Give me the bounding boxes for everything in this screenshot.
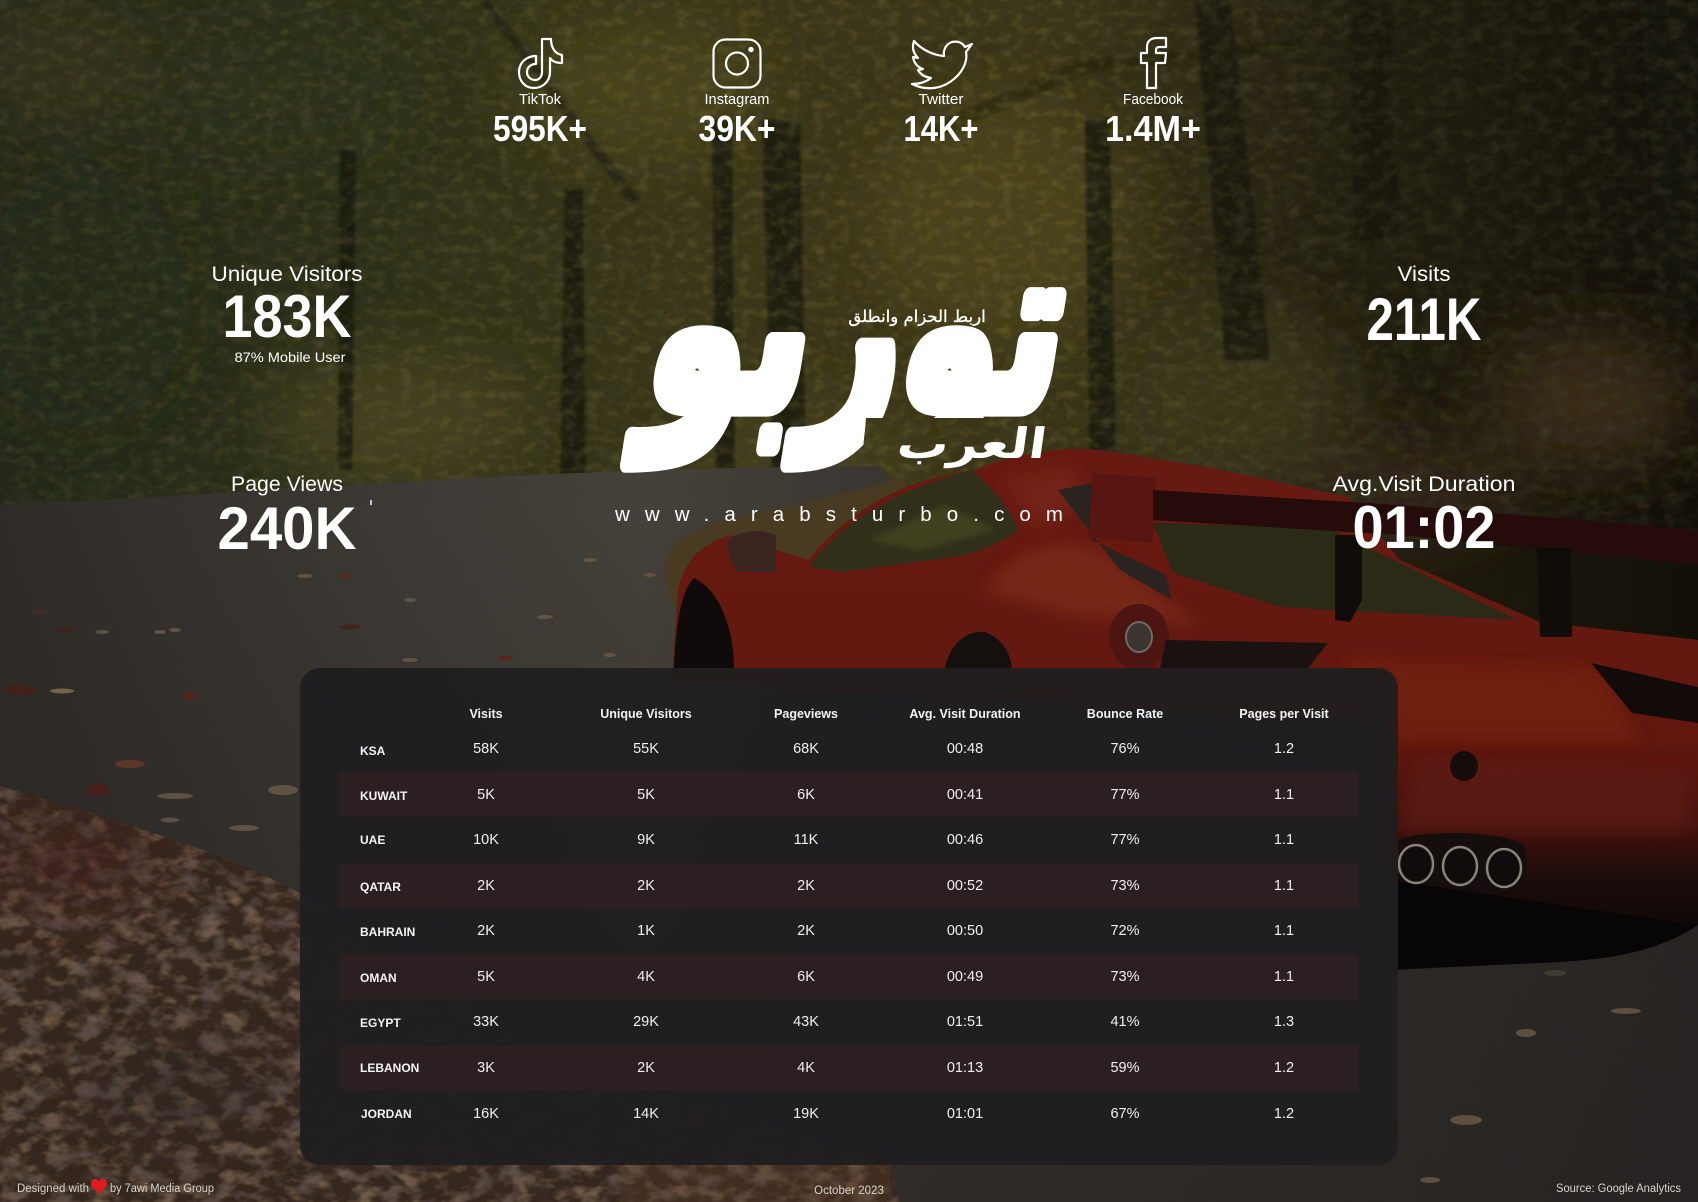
row: UAE [360,832,1294,848]
road surface [0,466,1698,1202]
row: Bahrain: 2K [797,923,815,939]
table stripes [339,772,1358,1090]
row: UAE: UAE [360,833,385,847]
stat: unique visitors: Unique Visitors [212,262,362,286]
logo tagline: اربط الحزام وانطلق [848,307,986,327]
row: UAE: 77% [1110,832,1140,848]
row: Jordan: 19K [793,1106,819,1122]
row: KSA: 55K [633,741,659,757]
row: Bahrain: 00:50 [947,923,983,939]
rear wheel arch [945,632,1012,668]
stat: unique visitors [212,262,362,365]
stat: page views: 240K [218,495,356,562]
icon: heart [91,1179,107,1194]
website url: www.arabsturbo.com [614,503,1063,526]
exhausts [1399,845,1521,887]
row: Egypt: 33K [473,1014,499,1030]
row: KSA: 1.2 [1274,741,1294,757]
windshield [809,470,1018,572]
row: UAE: 11K [794,832,819,848]
row: KSA: 76% [1110,741,1140,757]
row: Qatar: 00:52 [947,878,983,894]
row: Oman: 5K [477,969,495,985]
row: Kuwait [360,787,1294,803]
stat: unique visitors: 87% Mobile User [234,349,346,365]
logo: Arabs Turbo [615,287,1067,521]
row: Bahrain: 1K [637,923,655,939]
ground leaves bed [0,760,920,1202]
row: Bahrain: 2K [477,923,495,939]
stat: visits: Visits [1398,262,1450,286]
row: Jordan: JORDAN [361,1107,412,1121]
twitter stat [904,41,978,149]
row: KSA [360,741,1294,758]
icon: twitter [912,41,972,88]
carbon side intake [1058,483,1172,600]
instagram stat: 39K+ [698,108,776,149]
twitter stat: 14K+ [904,108,978,149]
row: Kuwait: 5K [477,787,495,803]
table header: Pageviews [774,707,838,721]
icon: instagram [714,40,760,88]
panel: country table [300,668,1398,1165]
roadside leaves near car [665,478,925,625]
row: Kuwait: 1.1 [1274,787,1294,803]
row: Egypt: 01:51 [947,1014,983,1030]
row: UAE: 00:46 [947,832,983,848]
tiktok stat [493,39,587,149]
road grain [0,500,1698,1202]
front wheel [674,578,734,668]
stat: unique visitors: 183K [222,283,352,350]
row: Lebanon: 3K [477,1060,495,1076]
road depth shade [0,466,1698,1202]
footer credit: by 7awi Media Group [110,1183,214,1195]
forest lit foliage [0,0,1690,540]
facebook stat: 1.4M+ [1105,108,1201,149]
row: Bahrain [360,923,1294,939]
footer credit: Designed with [17,1183,89,1195]
row: Bahrain: 1.1 [1274,923,1294,939]
logo main wordmark: توربو [625,196,1088,464]
table header [469,707,1330,721]
row: Jordan: 01:01 [947,1106,983,1122]
twitter stat: Twitter [918,92,964,108]
tail light [1109,604,1169,670]
facebook stat [1105,38,1201,149]
icon: tiktok [519,39,562,88]
row: Kuwait: 5K [637,787,655,803]
dark vent [1160,640,1328,668]
tiktok stat: TikTok [519,92,562,108]
table header: Bounce Rate [1087,707,1163,721]
row: Egypt: 1.3 [1274,1014,1294,1030]
stat: page views: Page Views [231,472,343,496]
rear wing [1153,490,1698,565]
footer source: Source: Google Analytics [1556,1183,1681,1195]
foliage texture light [0,0,1698,540]
row: Qatar: 2K [637,878,655,894]
row: Qatar: 2K [477,878,495,894]
row: Qatar: 73% [1110,878,1140,894]
tail light centre [1126,622,1152,652]
instagram stat: Instagram [704,92,770,108]
footer credit [17,1179,214,1195]
row: Egypt: 41% [1110,1014,1140,1030]
row: Kuwait: 6K [797,787,815,803]
row: Oman: 1.1 [1274,969,1294,985]
row: Lebanon [360,1060,1294,1076]
row: UAE: 10K [473,832,499,848]
row: Lebanon: LEBANON [360,1061,419,1075]
row: Qatar: 1.1 [1274,878,1294,894]
row: Oman: 6K [797,969,815,985]
stat: page views [218,472,372,562]
table header: Avg. Visit Duration [909,707,1021,721]
windshield reflection [870,505,995,550]
row: KSA: 68K [793,741,819,757]
table header: Unique Visitors [600,707,692,721]
instagram stat [698,40,776,149]
row: Egypt [360,1014,1294,1030]
row: Jordan: 14K [633,1106,659,1122]
tiktok stat: 595K+ [493,108,587,149]
car under shadow [1390,830,1698,970]
row: Jordan: 16K [473,1106,499,1122]
row: UAE: 9K [637,832,655,848]
row: Jordan: 1.2 [1274,1106,1294,1122]
rear fin [1089,473,1156,543]
row: Egypt: 43K [793,1014,819,1030]
exhaust surround [1398,833,1526,892]
icon: facebook [1141,38,1166,88]
row: KSA: 00:48 [947,741,983,757]
row: Lebanon: 59% [1110,1060,1140,1076]
facebook stat: Facebook [1123,92,1184,108]
row: KSA: 58K [473,741,499,757]
row: Jordan [361,1106,1294,1122]
engine cover glass [1153,523,1517,620]
row: Qatar: QATAR [360,880,401,894]
stat: average visit duration: Avg.Visit Duration [1332,472,1516,496]
row: Kuwait: KUWAIT [360,789,408,803]
stat: visits [1366,262,1482,353]
row: Oman [360,969,1294,985]
stat: average visit duration [1332,472,1516,561]
side mirror [727,531,776,572]
stat: visits: 211K [1366,286,1482,353]
rear badge [1450,751,1478,781]
row: Oman: 00:49 [947,969,983,985]
car body [672,449,1698,925]
row: Egypt: EGYPT [360,1016,401,1030]
row: Qatar: 2K [797,878,815,894]
stat: average visit duration: 01:02 [1352,494,1496,561]
row: Lebanon: 1.2 [1274,1060,1294,1076]
logo sub wordmark: العرب [894,420,1050,469]
row: Kuwait: 00:41 [947,787,983,803]
row: Oman: 73% [1110,969,1140,985]
row: Bahrain: 72% [1110,923,1140,939]
row: Bahrain: BAHRAIN [360,925,415,939]
scattered leaves on road [4,558,1641,1183]
row: Lebanon: 4K [797,1060,815,1076]
row: KSA: KSA [360,744,386,758]
wing struts [1335,535,1572,637]
body highlights [985,544,1200,625]
row: Qatar [360,878,1294,894]
footer date: October 2023 [814,1185,884,1197]
foliage texture dark [0,0,1698,540]
table header: Pages per Visit [1239,707,1330,721]
tree trunks [338,0,1698,500]
row: Lebanon: 01:13 [947,1060,983,1076]
row: Kuwait: 77% [1110,787,1140,803]
row: Jordan: 67% [1110,1106,1140,1122]
red sports car [672,449,1698,970]
social media row [493,38,1201,149]
rear black recess [1591,663,1698,723]
row: Lebanon: 2K [637,1060,655,1076]
row: Oman: 4K [637,969,655,985]
row: Egypt: 29K [633,1014,659,1030]
row: UAE: 1.1 [1274,832,1294,848]
table header: Visits [469,707,503,721]
row: Oman: OMAN [360,971,397,985]
